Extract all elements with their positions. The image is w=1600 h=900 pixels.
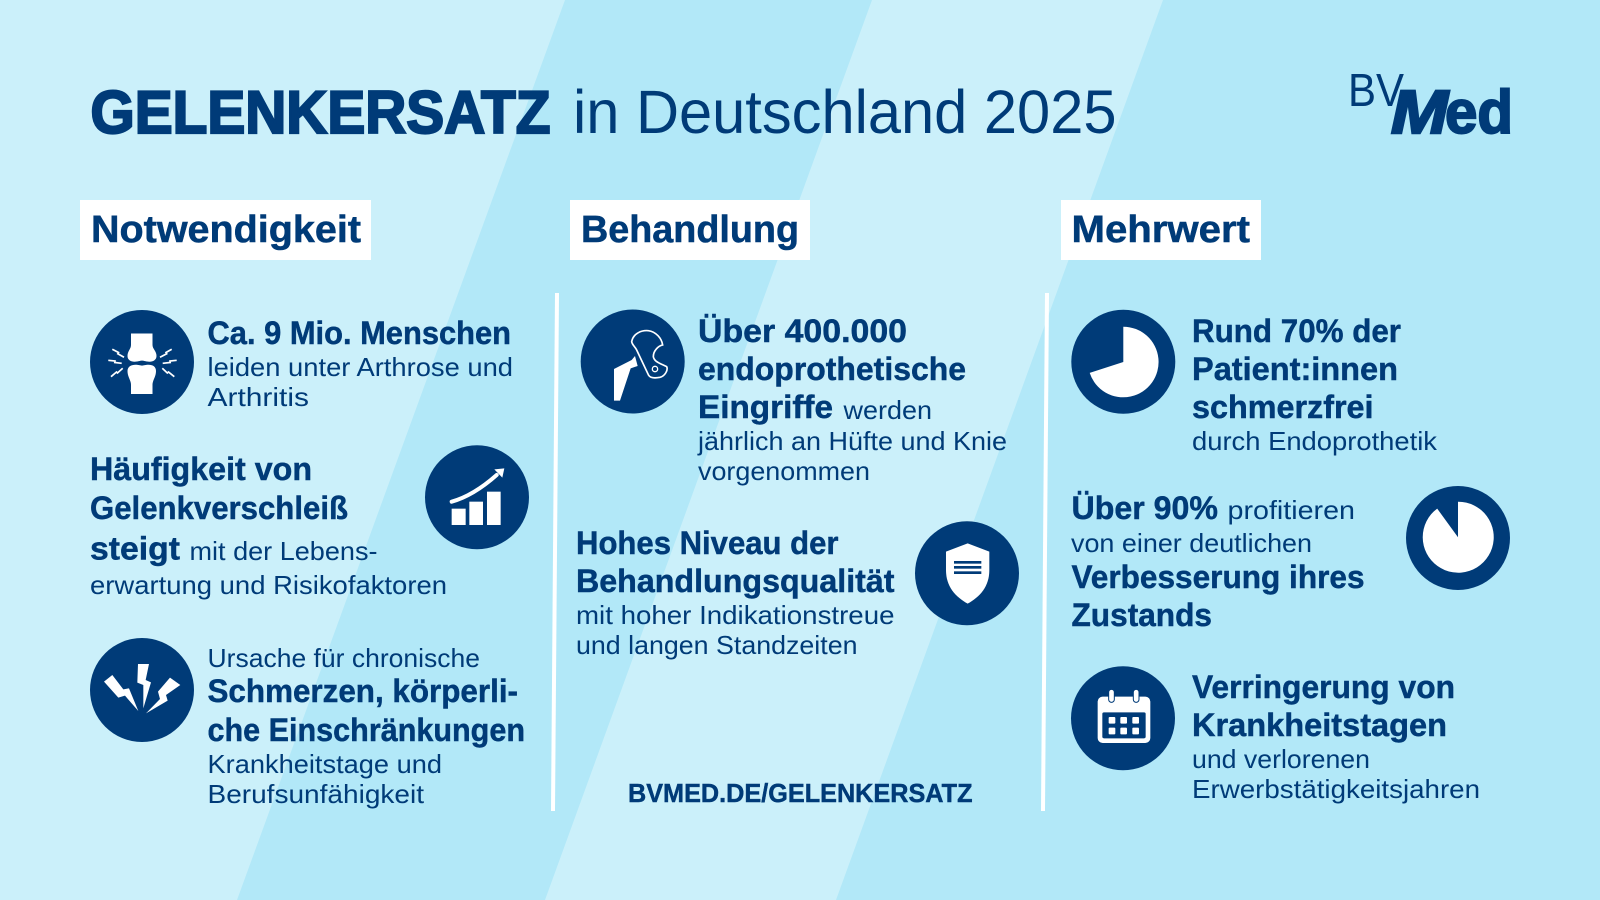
text: Verringerung von Krankheitstagen	[1192, 669, 1480, 804]
icon: hip implant	[581, 310, 685, 414]
heading: Mehrwert	[1061, 200, 1261, 260]
icon: pain bolts	[90, 638, 194, 742]
icon: rising bar chart	[425, 445, 529, 549]
text: Häufigkeit von Gelenkverschleiß	[90, 451, 447, 600]
title: in Deutschland 2025	[573, 78, 1116, 146]
text: Über 90% profitieren: von einer deutlichen	[1071, 528, 1312, 558]
text: Schmerzen, körperliche Einschränkungen: che Einschränkungen	[208, 712, 525, 748]
text: Verringerung von Krankheitstagen: Verringerung von	[1192, 669, 1455, 705]
text: Hohes Niveau der Behandlungsqualität: Behandlungsqualität	[576, 563, 895, 599]
text: Hohes Niveau der Behandlungsqualität	[576, 525, 895, 660]
text: Ca. 9 Mio. Menschen: leiden unter Arthrose und	[208, 352, 513, 382]
text: Häufigkeit von Gelenkverschleiß: erwartung und Risikofaktoren	[90, 570, 447, 600]
logo: BVMed	[1348, 64, 1513, 146]
heading: Notwendigkeit: Notwendigkeit	[91, 209, 361, 251]
text: Verringerung von Krankheitstagen: Erwerbstätigkeitsjahren	[1192, 774, 1480, 804]
text: Über 90% profitieren: Über 90%	[1072, 490, 1218, 526]
text: Über 90% profitieren: Zustands	[1072, 597, 1212, 633]
panel: Mehrwert	[1061, 200, 1510, 804]
text: Häufigkeit von Gelenkverschleiß: mit der Lebens-	[190, 536, 378, 566]
text: Ca. 9 Mio. Menschen: Arthritis	[208, 382, 309, 412]
title	[90, 78, 1116, 146]
panel: Behandlung	[570, 200, 1019, 808]
logo: BVMed: BV	[1348, 64, 1404, 116]
text: Ca. 9 Mio. Menschen: Ca. 9 Mio. Menschen	[208, 315, 511, 351]
text: Über 400.000 endoprothetische Eingriffe: werden	[842, 395, 932, 425]
icon: calendar	[1071, 666, 1175, 770]
text: Verringerung von Krankheitstagen: und verlorenen	[1192, 744, 1370, 774]
link: bvmed.de/gelenkersatz: BVMED.DE/GELENKERSATZ	[628, 778, 973, 808]
heading: Behandlung: Behandlung	[581, 209, 799, 251]
text: Rund 70% der Patient:innen schmerzfrei: durch Endoprothetik	[1192, 426, 1438, 456]
text: Rund 70% der Patient:innen schmerzfrei: Patient:innen	[1192, 351, 1398, 387]
text: Über 90% profitieren	[1071, 490, 1364, 633]
text: Häufigkeit von Gelenkverschleiß: Häufigkeit von	[90, 451, 312, 487]
panel: Notwendigkeit	[80, 200, 529, 809]
text: Schmerzen, körperliche Einschränkungen: Ursache für chronische	[208, 643, 480, 673]
text: Schmerzen, körperliche Einschränkungen: Krankheitstage und	[208, 749, 442, 779]
text: Über 400.000 endoprothetische Eingriffe: jährlich an Hüfte und Knie	[697, 426, 1007, 456]
text: Häufigkeit von Gelenkverschleiß: Gelenkverschleiß	[90, 490, 348, 526]
text: Rund 70% der Patient:innen schmerzfrei: Rund 70% der	[1192, 313, 1401, 349]
text: Rund 70% der Patient:innen schmerzfrei	[1192, 313, 1438, 456]
text: Hohes Niveau der Behandlungsqualität: Hohes Niveau der	[576, 525, 838, 561]
logo: BVMed: M	[1391, 78, 1449, 146]
text: Über 400.000 endoprothetische Eingriffe: endoprothetische	[698, 351, 966, 387]
text: Über 90% profitieren: Verbesserung ihres	[1072, 559, 1364, 595]
icon: pie 70 percent	[1071, 310, 1175, 414]
text: Über 400.000 endoprothetische Eingriffe: vorgenommen	[698, 456, 870, 486]
text: Über 400.000 endoprothetische Eingriffe: Über 400.000	[698, 313, 907, 349]
title: GELENKERSATZ	[90, 79, 550, 146]
text: Verringerung von Krankheitstagen: Krankheitstagen	[1192, 707, 1447, 743]
icon: quality shield	[915, 521, 1019, 625]
heading: Mehrwert: Mehrwert	[1072, 209, 1250, 251]
text: Rund 70% der Patient:innen schmerzfrei: schmerzfrei	[1192, 389, 1374, 425]
text: Über 400.000 endoprothetische Eingriffe: Eingriffe	[698, 389, 833, 425]
text: Hohes Niveau der Behandlungsqualität: mit hoher Indikationstreue	[576, 600, 894, 630]
logo: BVMed: ed	[1445, 78, 1513, 146]
text: Häufigkeit von Gelenkverschleiß: steigt	[90, 530, 180, 566]
text: Über 90% profitieren: profitieren	[1228, 495, 1355, 525]
text: Schmerzen, körperliche Einschränkungen	[208, 643, 525, 809]
icon: pie 90 percent	[1406, 486, 1510, 590]
text: Schmerzen, körperliche Einschränkungen: Schmerzen, körperli-	[208, 673, 518, 709]
heading: Notwendigkeit	[80, 200, 371, 260]
icon: knee joint	[90, 310, 194, 414]
heading: Behandlung	[570, 200, 810, 260]
text: Über 400.000 endoprothetische Eingriffe	[697, 313, 1007, 486]
text: Ca. 9 Mio. Menschen	[208, 315, 513, 412]
text: Hohes Niveau der Behandlungsqualität: und langen Standzeiten	[576, 630, 858, 660]
text: Schmerzen, körperliche Einschränkungen: Berufsunfähigkeit	[208, 779, 425, 809]
